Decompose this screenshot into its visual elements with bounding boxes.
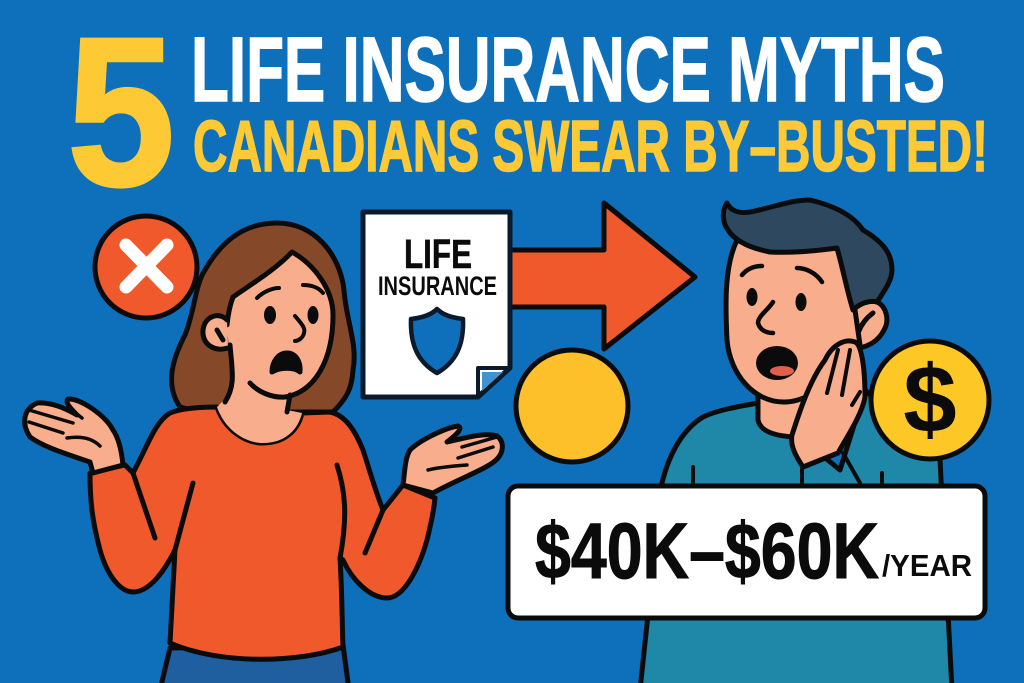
salary label box	[508, 486, 985, 618]
right hand	[403, 426, 502, 493]
ear	[853, 301, 887, 348]
face outline	[225, 252, 333, 412]
orange sweater	[90, 407, 435, 659]
document: life insurance	[363, 212, 510, 397]
yellow circle	[516, 350, 628, 462]
sweater details	[693, 453, 882, 483]
woman figure	[25, 223, 502, 683]
neck	[758, 395, 810, 437]
face	[726, 240, 860, 402]
man figure	[640, 200, 952, 683]
document: life insurance: LIFE	[404, 231, 472, 277]
icon: red X circle	[95, 216, 197, 318]
jeans	[160, 645, 349, 683]
hand on cheek	[792, 341, 865, 467]
left hand	[25, 399, 123, 473]
hair	[172, 223, 354, 412]
sweater creases	[133, 465, 383, 558]
salary label box: /YEAR	[882, 548, 972, 583]
arrow	[505, 203, 695, 349]
eyebrows and nose	[742, 266, 822, 333]
mouth	[756, 346, 798, 380]
icon: dollar coin	[871, 341, 989, 459]
eyes	[264, 306, 318, 324]
eyes	[746, 288, 806, 311]
mouth	[272, 353, 300, 372]
title number 5: 5	[67, 0, 175, 230]
hair	[723, 200, 892, 310]
eyebrows and nose	[257, 285, 323, 341]
shield	[411, 309, 463, 373]
salary label box: $40K–$60K	[535, 506, 879, 595]
skin fill of face and neck	[217, 252, 333, 443]
icon: dollar coin: $	[903, 346, 957, 453]
ear	[203, 316, 228, 349]
teal sweater	[640, 390, 952, 683]
document: life insurance: INSURANCE	[378, 271, 497, 301]
